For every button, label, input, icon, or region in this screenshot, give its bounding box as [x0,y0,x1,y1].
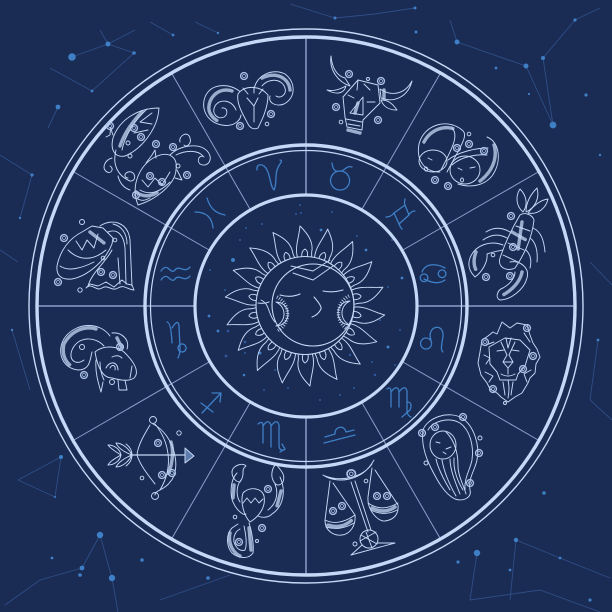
right cheek [338,296,350,330]
middle thin ring [150,150,462,462]
sun rays [225,226,385,386]
stars inside the inner circle [208,204,403,401]
symbol: libra [324,427,355,443]
illustration: scorpio scorpion [228,464,284,558]
moon face [272,264,354,346]
symbol: aries [257,160,282,190]
illustration: leo lion [478,322,540,404]
fish one [104,108,159,190]
symbol: leo [421,327,443,352]
hair line [291,260,333,280]
sun and moon [225,226,385,386]
illustration: gemini twins [418,124,498,189]
zodiac symbols [161,160,446,452]
illustration: capricorn goat [61,326,136,392]
left cheek [261,297,288,331]
fish two [135,134,210,205]
illustration: virgo maiden [419,414,482,500]
symbol: capricorn [167,322,186,358]
symbol: virgo [387,388,411,417]
sun disk [256,256,354,354]
wheel spokes [37,37,575,575]
illustration: libra scales [323,460,398,555]
illustration: pisces fish [104,108,210,205]
symbol: pisces [195,198,225,228]
symbol: taurus [331,163,352,190]
symbol: aquarius [161,267,190,280]
inner circle [195,195,417,417]
illustration: aquarius water vase [55,220,134,292]
symbol: sagittarius [201,393,221,413]
symbol: cancer [420,265,446,283]
symbol: gemini [386,199,415,229]
illustration: aries ram [204,72,293,129]
middle thick ring [145,145,467,467]
outer thick ring [37,37,575,575]
eyes and nose [258,290,343,317]
symbol: scorpio [258,422,285,452]
illustration: taurus bull [327,56,412,133]
illustration: sagittarius bow and arrow [108,416,194,500]
illustration: cancer crayfish [469,188,548,300]
